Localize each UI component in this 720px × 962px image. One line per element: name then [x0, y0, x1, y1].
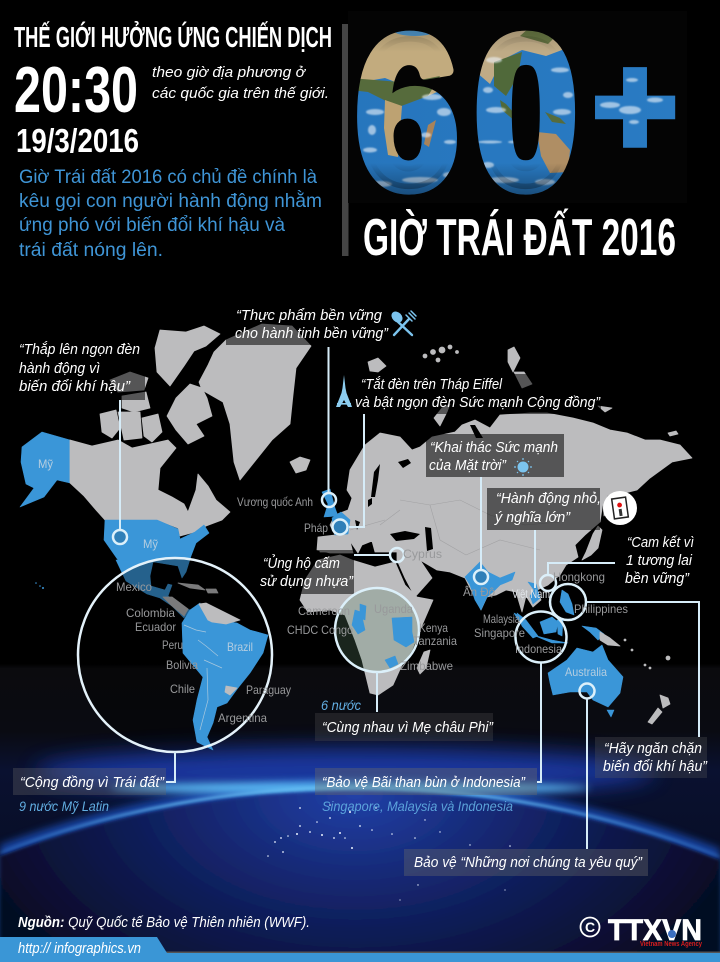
- small Pacific islands: [624, 639, 670, 669]
- intro paragraph: kêu gọi con người hành động nhằm: [19, 190, 322, 212]
- callout: places we love: [404, 684, 648, 876]
- logo: TTXVN: C: [585, 919, 595, 935]
- local time note: theo giờ địa phương ở: [152, 64, 307, 81]
- map country labels: Zimbabwe: [400, 659, 453, 673]
- callout: ban plastic: [257, 548, 404, 594]
- logo: 60+: +: [593, 27, 677, 186]
- callout: commitment: bền vững”: [625, 570, 690, 587]
- map country labels: Philippines: [574, 602, 628, 616]
- Madagascar: [417, 650, 430, 674]
- Vietnam: [528, 582, 540, 604]
- local time note: các quốc gia trên thế giới.: [152, 85, 329, 102]
- map country labels: Kenya: [419, 621, 448, 635]
- Southeast Asia islands: [514, 590, 604, 643]
- logo: TTXVN: Vietnam News Agency: [640, 941, 702, 948]
- callout: six African countries: 6 nước: [321, 697, 361, 713]
- local time note: [152, 64, 329, 102]
- header panel: [14, 20, 348, 261]
- USA: [104, 520, 209, 578]
- map country labels: Mỹ: [38, 457, 53, 471]
- callout: small actions: “Hành động nhỏ,: [496, 490, 601, 507]
- callout: sustainable food: cho hành tinh bền vững”: [235, 325, 389, 342]
- Africa circle: [335, 588, 419, 672]
- UK: [322, 489, 338, 517]
- callout: protect peatland: [315, 612, 566, 814]
- map country labels: Mỹ: [143, 537, 158, 551]
- map country labels: Uganda: [374, 602, 413, 616]
- heading: world responds: THẾ GIỚI HƯỞNG ỨNG CHIẾN DỊCH: [14, 20, 332, 54]
- New Zealand: [648, 695, 670, 724]
- callout: community for Earth: “Cộng đồng vì Trái đất”: [20, 774, 165, 791]
- callout: Eiffel tower: [332, 374, 601, 534]
- map country labels: Tanzania: [413, 634, 457, 648]
- callout: Eiffel tower: “Tắt đèn trên Tháp Eiffel: [361, 376, 503, 393]
- South America circle outline: [78, 558, 272, 752]
- callout: protect peatland: “Bảo vệ Bãi than bùn ở Indonesia”: [322, 774, 526, 791]
- callout: six African countries: [315, 672, 494, 741]
- map country labels: Vương quốc Anh: [237, 495, 313, 509]
- vertical divider: [342, 24, 348, 256]
- callout: light a flame: [17, 338, 145, 544]
- Eurasia: [317, 413, 692, 612]
- South America: [182, 603, 268, 750]
- Canadian arctic islands: [100, 326, 220, 444]
- India: [465, 562, 515, 610]
- callout: solar power: [426, 434, 564, 584]
- Canada: [70, 440, 230, 536]
- map country labels: Brazil: [227, 640, 253, 654]
- map country labels: Bolivia: [166, 658, 198, 672]
- Africa: [300, 555, 433, 695]
- callout: small actions: [487, 488, 601, 588]
- callout: stop climate change: [550, 584, 708, 778]
- callout: Eiffel tower: và bật ngọn đèn Sức mạnh Cộng đồng”: [355, 394, 601, 411]
- map country labels: [38, 457, 628, 725]
- New Guinea: [600, 632, 620, 646]
- country borders: [350, 500, 560, 555]
- map country labels: Việt Nam: [512, 587, 550, 601]
- callout: places we love: Bảo vệ “Những nơi chúng ta yêu quý”: [414, 854, 643, 871]
- Spain shaded: [318, 536, 350, 552]
- logo: 60+: [348, 0, 687, 233]
- world map: [20, 324, 692, 752]
- callout: solar power: “Khai thác Sức mạnh: [430, 439, 558, 456]
- callout: sustainable food: [226, 303, 390, 507]
- callout: ban plastic: “Ủng hộ cấm: [263, 554, 340, 572]
- Australia: [548, 645, 623, 707]
- Caribbean: [178, 583, 218, 593]
- callout: community for Earth: 9 nước Mỹ Latin: [19, 798, 109, 814]
- callout: commitment: 1 tương lai: [626, 552, 693, 569]
- South America circle: [78, 558, 272, 752]
- Mexico and Central America: [116, 560, 190, 618]
- Alaska: [20, 432, 70, 507]
- map country labels: Cyprus: [403, 547, 442, 561]
- map country labels: Ecuador: [135, 620, 176, 634]
- map country labels: Mexico: [116, 580, 152, 594]
- map country labels: Indonesia: [515, 642, 562, 656]
- map country labels: Pháp: [304, 521, 328, 535]
- African member countries: [352, 604, 414, 668]
- Japan and islands: [582, 492, 608, 560]
- map country labels: Hongkong: [553, 570, 605, 584]
- time 20:30: 20:30: [14, 53, 138, 126]
- intro paragraph: trái đất nóng lên.: [19, 240, 163, 261]
- callout: sustainable food: “Thực phẩm bền vững: [236, 307, 383, 324]
- map country labels: Singapore: [474, 626, 525, 640]
- logo: TTXVN: TTXVN: [608, 914, 702, 947]
- website link: http:// infographics.vn: [18, 940, 141, 957]
- Africa circle outline: [335, 588, 419, 672]
- callout: small actions: ý nghĩa lớn”: [494, 509, 571, 526]
- icon: sun: [514, 458, 532, 476]
- icon: Eiffel tower: [336, 375, 352, 407]
- callout: community for Earth: [13, 752, 175, 814]
- map country labels: Malaysia: [483, 612, 520, 626]
- callout: ban plastic: sử dụng nhựa”: [260, 573, 354, 590]
- icon: fork and spoon: [391, 311, 416, 335]
- callout: solar power: của Mặt trời”: [429, 457, 507, 474]
- callout: commitment: [540, 534, 694, 591]
- map country labels: Ấn Độ: [463, 584, 495, 599]
- map country labels: Argentina: [218, 711, 267, 725]
- map country labels: Chile: [170, 682, 195, 696]
- map country labels: CHDC Congo: [287, 623, 353, 637]
- callout: light a flame: biến đổi khí hậu”: [19, 378, 131, 395]
- Greenland: [199, 324, 311, 480]
- intro paragraph: ứng phó với biến đổi khí hậu và: [19, 215, 285, 236]
- map country labels: Colombia: [126, 606, 175, 620]
- map country labels: Cameroon: [298, 604, 350, 618]
- map country labels: Paraguay: [246, 683, 291, 697]
- icon: calendar badge: [603, 491, 637, 525]
- callout: stop climate change: biến đổi khí hậu”: [603, 758, 708, 775]
- Iceland: [290, 457, 310, 473]
- footer bar: [0, 937, 720, 962]
- callout: six African countries: “Cùng nhau vì Mẹ châu Phi”: [322, 719, 494, 736]
- callout: commitment: “Cam kết vì: [627, 534, 694, 551]
- callout: protect peatland: Singapore, Malaysia và Indonesia: [322, 798, 513, 814]
- Arctic Russian islands: [368, 345, 678, 436]
- intro paragraph: Giờ Trái đất 2016 có chủ đề chính là: [19, 167, 317, 188]
- France: [332, 512, 350, 535]
- callout: light a flame: hành động vì: [19, 360, 100, 377]
- map country labels: Australia: [565, 665, 607, 679]
- Tasmania: [607, 710, 614, 717]
- callout: stop climate change: “Hãy ngăn chặn: [604, 740, 702, 757]
- map country labels: Peru: [162, 638, 183, 652]
- inland seas and gulfs: [355, 425, 483, 551]
- source note: Nguồn: Quỹ Quốc tế Bảo vệ Thiên nhiên (WWF).: [18, 914, 310, 931]
- intro paragraph: [19, 167, 322, 261]
- callout: light a flame: “Thắp lên ngọn đèn: [19, 341, 140, 358]
- date: 19/3/2016: [16, 122, 139, 159]
